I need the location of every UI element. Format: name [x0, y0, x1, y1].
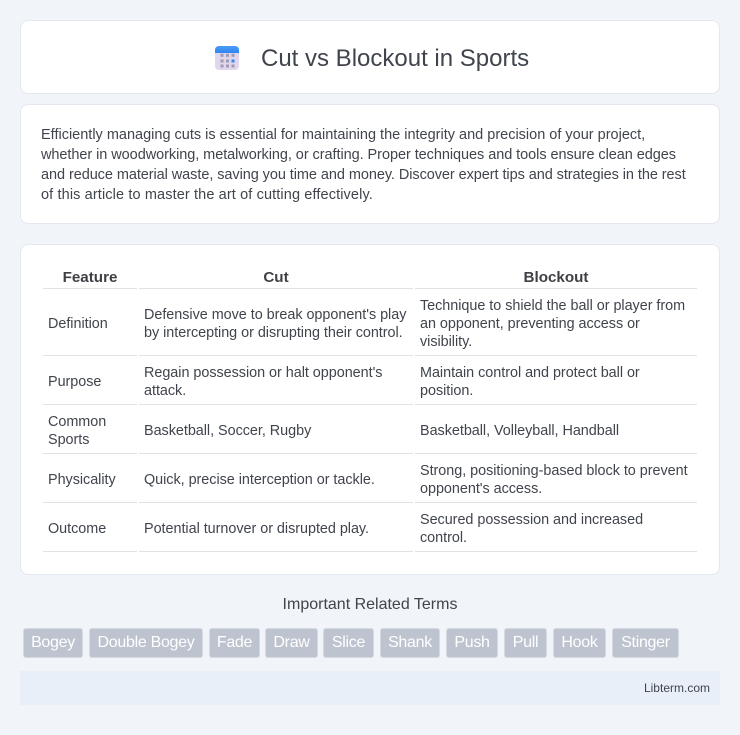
comparison table content: Technique to shield the ball or player from — [420, 298, 685, 314]
related term tags — [23, 628, 679, 658]
comparison table content: Cut — [263, 269, 289, 286]
comparison table content: Sports — [48, 432, 89, 448]
comparison table content: control. — [420, 530, 467, 546]
comparison table content: Basketball, Soccer, Rugby — [144, 423, 311, 439]
related term tags: Pull — [513, 634, 538, 651]
text: introduction paragraph: whether in woodworking, metalworking, or crafting. Proper techniques and tools ensure clean edges — [41, 147, 676, 163]
related term tags: Fade — [217, 634, 252, 651]
comparison table content: Strong, positioning-based block to prevent — [420, 463, 688, 479]
heading: important related terms: Important Related Terms — [283, 596, 457, 613]
icon: calendar — [215, 46, 239, 70]
comparison table content: Outcome — [48, 521, 106, 537]
comparison table content: Quick, precise interception or tackle. — [144, 472, 375, 488]
footer text: source: Libterm.com — [644, 681, 710, 695]
text: introduction paragraph: and reduce material waste, saving you time and money. Discover expert tips and strategies in the rest — [41, 167, 686, 183]
text: introduction paragraph: of this article to master the art of cutting effectively. — [41, 187, 373, 203]
related term tags: Bogey — [31, 634, 75, 651]
related term tags: Double Bogey — [98, 634, 194, 651]
footer — [20, 671, 720, 705]
panel: header — [20, 20, 720, 94]
comparison table content: an opponent, preventing access or — [420, 316, 640, 332]
panel: introduction — [20, 104, 720, 224]
comparison table content: attack. — [144, 383, 186, 399]
comparison table content — [43, 269, 697, 552]
comparison table content: Secured possession and increased — [420, 512, 643, 528]
related term tags: Draw — [273, 634, 310, 651]
comparison table content: Common — [48, 414, 106, 430]
comparison table content: Purpose — [48, 374, 101, 390]
title: Cut vs Blockout in Sports — [261, 45, 529, 72]
comparison table content: Defensive move to break opponent's play — [144, 307, 406, 323]
comparison table content: opponent's access. — [420, 481, 542, 497]
text: introduction paragraph — [41, 127, 686, 203]
related term tags: Shank — [388, 634, 432, 651]
related term tags: Stinger — [621, 634, 670, 651]
comparison table content: Potential turnover or disrupted play. — [144, 521, 369, 537]
comparison table content: Blockout — [524, 269, 588, 286]
comparison table content: by intercepting or disrupting their control. — [144, 325, 403, 341]
comparison table content: Regain possession or halt opponent's — [144, 365, 382, 381]
comparison table content: Definition — [48, 316, 108, 332]
comparison table content: position. — [420, 383, 473, 399]
comparison table content: Maintain control and protect ball or — [420, 365, 640, 381]
comparison table content: Feature — [63, 269, 117, 286]
related term tags: Slice — [332, 634, 365, 651]
text: introduction paragraph: Efficiently managing cuts is essential for maintaining the integrity and precision of your project, — [41, 127, 645, 143]
comparison table content: Physicality — [48, 472, 116, 488]
related term tags: Push — [454, 634, 490, 651]
related term tags: Hook — [561, 634, 598, 651]
panel: comparison table — [20, 244, 720, 575]
comparison table content: visibility. — [420, 334, 472, 350]
comparison table content: Basketball, Volleyball, Handball — [420, 423, 619, 439]
